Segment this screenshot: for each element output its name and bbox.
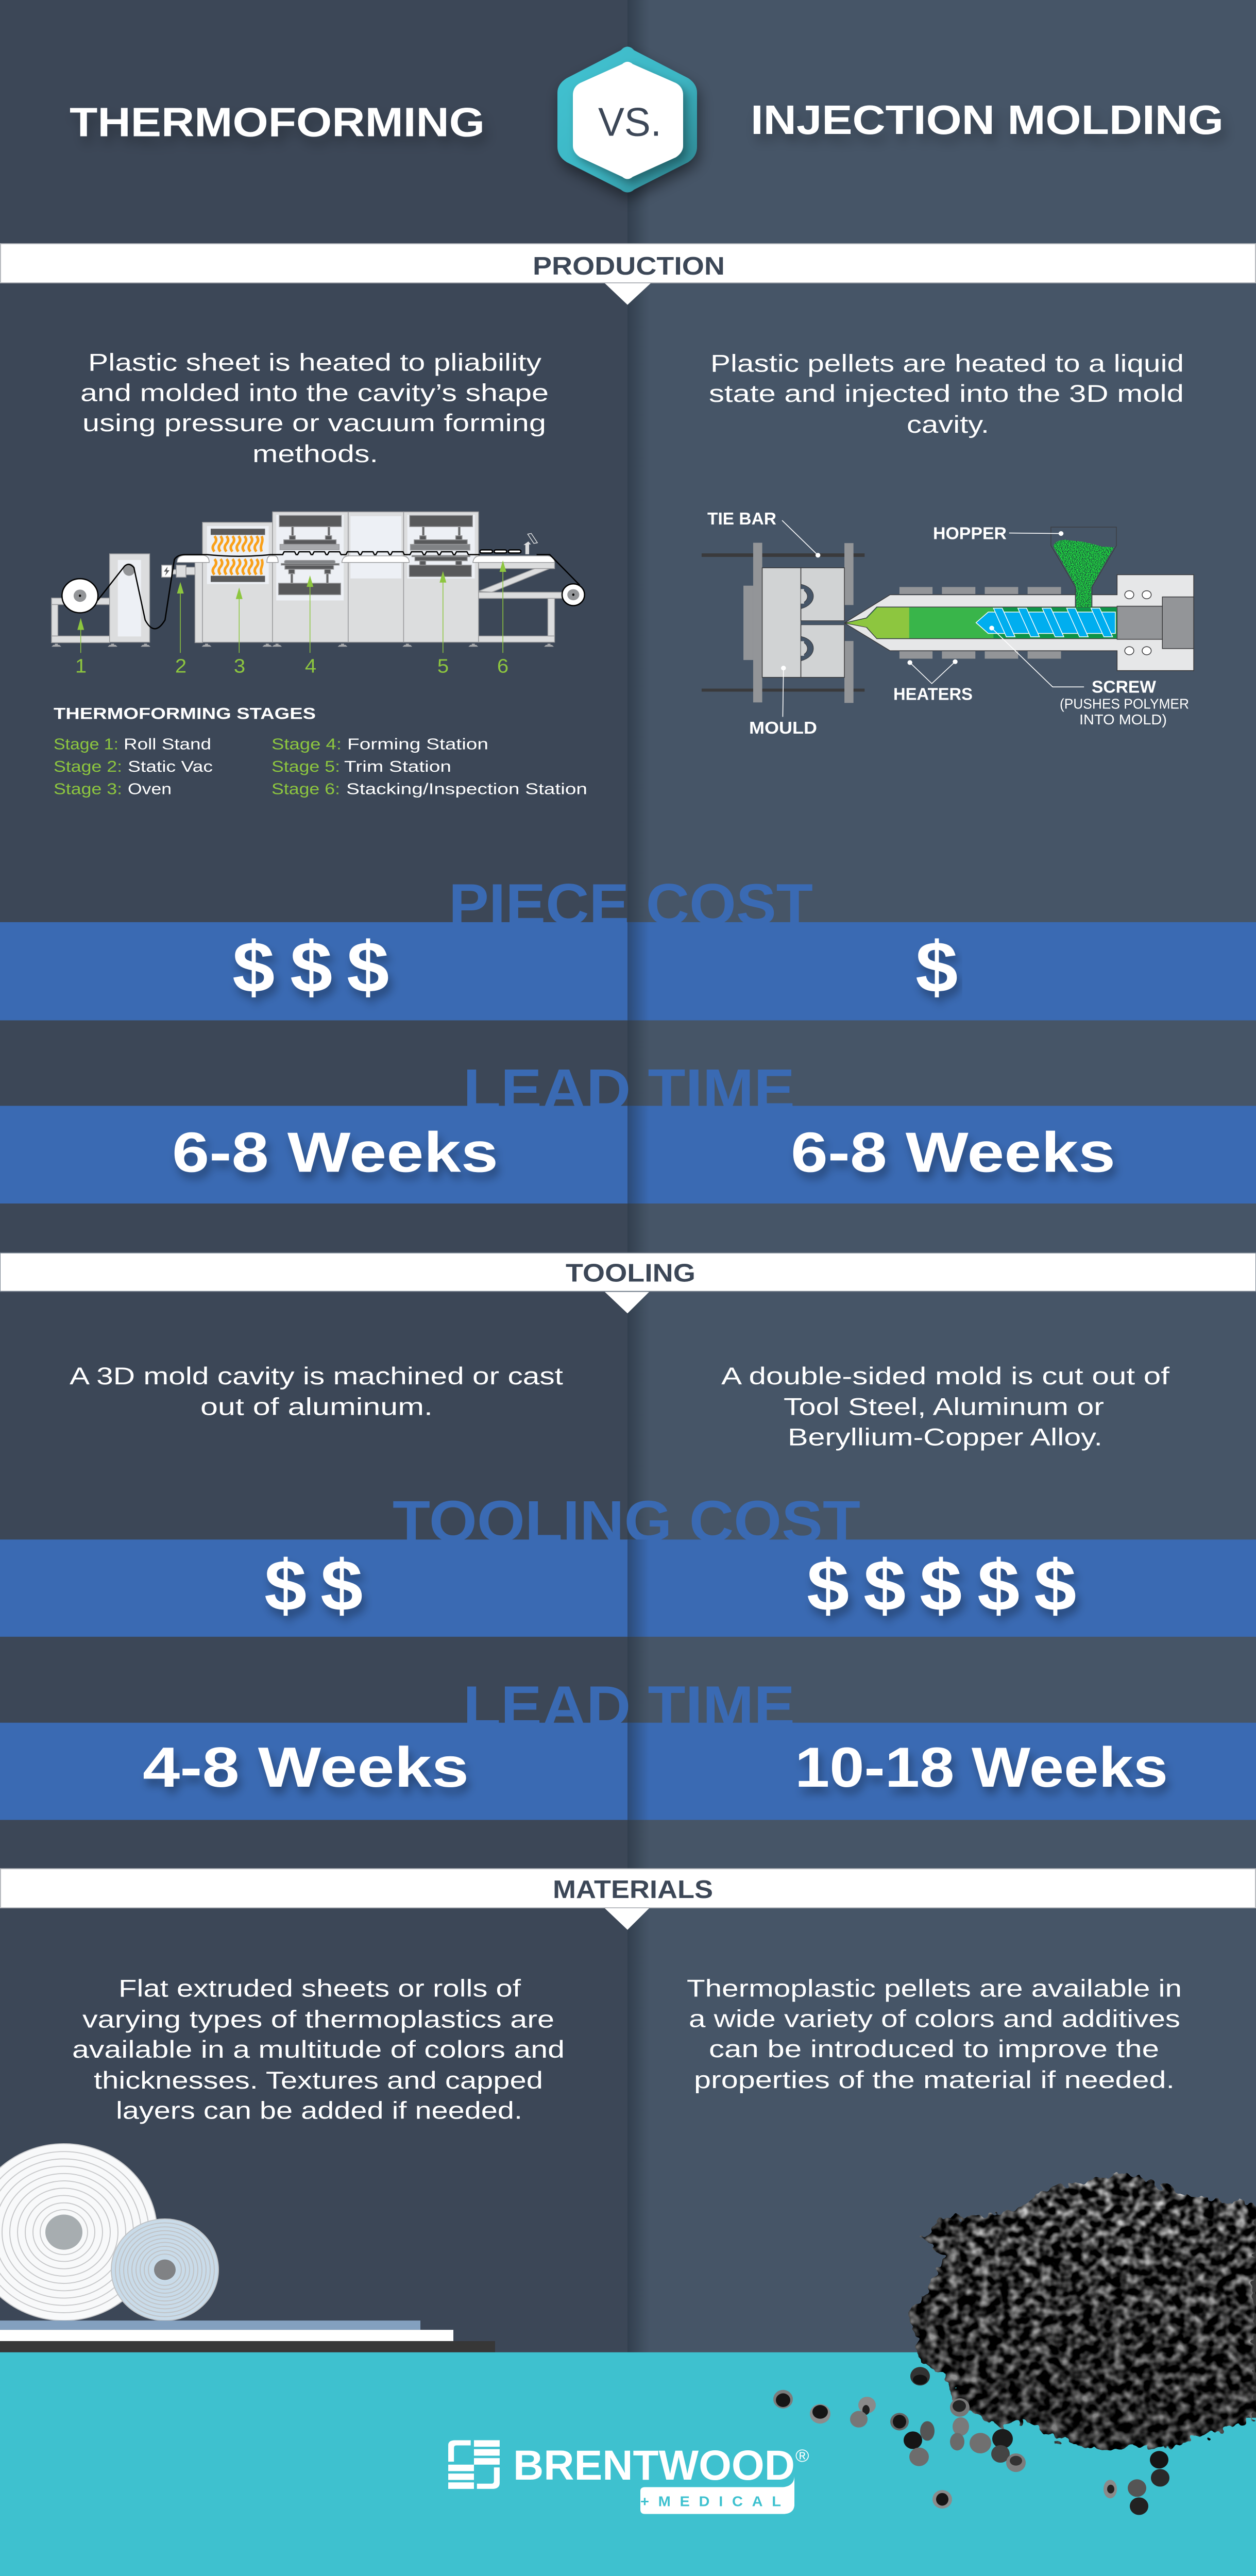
header (70, 47, 1224, 193)
logo: Brentwood Medical: BRENTWOOD (513, 2442, 795, 2489)
platens (743, 543, 854, 703)
diagram labels: SCREW (1092, 677, 1157, 697)
title: injection molding: INJECTION MOLDING (751, 97, 1224, 143)
text: injection molding production description: state and injected into the 3D mold (709, 380, 1184, 408)
melt chamber (844, 607, 1117, 639)
sheet path (97, 552, 580, 629)
scattered pellets (773, 2367, 1169, 2515)
legend: thermoforming stages: Static Vac (128, 758, 213, 775)
section banner: materials: MATERIALS (553, 1875, 713, 1904)
panel: production lead time: 6-8 Weeks (791, 1121, 1115, 1184)
text: thermoforming production description (80, 349, 549, 468)
legend: thermoforming stages: Stage 1: (54, 735, 118, 753)
stage numbers: 4 (305, 655, 316, 677)
section banner: production (1, 244, 1255, 305)
logo: Brentwood Medical: ® (795, 2446, 809, 2466)
text: injection molding tooling description: Tool Steel, Aluminum or (784, 1394, 1104, 1420)
green stage arrows (77, 561, 506, 653)
panel: tooling lead time: 4-8 Weeks (143, 1736, 469, 1799)
icon: small blue roll (111, 2219, 218, 2320)
stacked parts (480, 550, 521, 553)
legend: thermoforming stages: Trim Station (344, 758, 451, 775)
text: thermoforming materials description: layers can be added if needed. (116, 2097, 522, 2124)
illustration: plastic rolls and sheets (0, 2144, 495, 2352)
diagram labels: TIE BAR (707, 510, 776, 529)
icon: logo mark (448, 2440, 500, 2489)
mould (762, 568, 844, 677)
diagram labels: HOPPER (933, 524, 1007, 543)
rolls (62, 579, 98, 613)
text: thermoforming materials description: varying types of thermoplastics are (82, 2006, 554, 2033)
text: thermoforming tooling description (70, 1363, 564, 1420)
diagram: injection molding machine (702, 510, 1194, 738)
medical tab (640, 2477, 794, 2514)
stage numbers: 5 (437, 655, 449, 677)
rear housing (1117, 597, 1194, 649)
conveyor rests (177, 555, 554, 563)
exit table (479, 563, 563, 642)
text: injection molding materials description (687, 1975, 1182, 2094)
diagram labels (707, 510, 1189, 738)
text: thermoforming materials description: available in a multitude of colors and (72, 2036, 565, 2063)
text: thermoforming materials description: Flat extruded sheets or rolls of (118, 1975, 521, 2002)
section banner: tooling: TOOLING (566, 1259, 695, 1287)
legend: thermoforming stages: Forming Station (347, 735, 488, 753)
trim station press (409, 515, 472, 577)
text: injection molding tooling description: Beryllium-Copper Alloy. (788, 1423, 1102, 1451)
legend: thermoforming stages: Stacking/Inspection Station (346, 780, 587, 798)
stage numbers: 1 (75, 655, 87, 677)
diagram labels: MOULD (749, 719, 817, 738)
diagram labels: (PUSHES POLYMER (1060, 696, 1189, 711)
stage numbers: 3 (234, 655, 245, 677)
panel: piece cost: PIECE COST (449, 872, 813, 937)
legend: thermoforming stages: Oven (128, 780, 172, 798)
vs hexagon badge (557, 47, 697, 193)
section banner: tooling (0, 1253, 1256, 1313)
text: injection molding tooling description: A double-sided mold is cut out of (721, 1363, 1170, 1389)
panel: production lead time: LEAD TIME (463, 1057, 795, 1122)
text: thermoforming tooling description: out of aluminum. (200, 1394, 433, 1420)
diagram labels: INTO MOLD) (1079, 711, 1167, 727)
section banner: materials (1, 1869, 1255, 1930)
barrel (844, 575, 1194, 671)
legend: thermoforming stages: Stage 5: (271, 758, 340, 775)
panel: tooling lead time: 10-18 Weeks (795, 1736, 1168, 1799)
panel: production lead time (0, 1057, 1256, 1204)
screw (976, 608, 1115, 637)
text: thermoforming tooling description: A 3D mold cavity is machined or cast (70, 1363, 564, 1389)
section banner: production: PRODUCTION (533, 251, 725, 280)
panel: tooling cost (0, 1489, 1256, 1637)
tie bars (702, 553, 864, 691)
diagram: thermoforming machine (52, 512, 585, 677)
text: thermoforming materials description (72, 1975, 565, 2124)
text: thermoforming production description: methods. (252, 440, 378, 468)
title: thermoforming: THERMOFORMING (70, 99, 485, 145)
text: injection molding materials description: properties of the material if needed. (694, 2066, 1175, 2094)
text: thermoforming production description: using pressure or vacuum forming (82, 410, 546, 437)
footer band (0, 2352, 1256, 2576)
panel: tooling lead time: LEAD TIME (463, 1674, 795, 1739)
legend: thermoforming stages: Stage 4: (271, 735, 342, 753)
forming station press (279, 515, 342, 595)
text: thermoforming production description: and molded into the cavity’s shape (80, 380, 549, 406)
panel: production lead time: 6-8 Weeks (172, 1121, 498, 1184)
text: injection molding production description (709, 350, 1184, 438)
logo: Brentwood Medical: +MEDICAL (640, 2493, 781, 2509)
panel: tooling cost: TOOLING COST (393, 1489, 860, 1554)
legend: thermoforming stages: Stage 3: (54, 780, 122, 798)
diagram labels: HEATERS (893, 685, 973, 704)
legend: thermoforming stages: Stage 6: (271, 780, 340, 798)
panel: tooling cost: $$$$$ (807, 1545, 1076, 1626)
illustration: pile of plastic pellets (773, 2173, 1256, 2515)
roll stand (52, 554, 149, 642)
text: thermoforming materials description: thicknesses. Textures and capped (94, 2067, 543, 2094)
machine cabinets (195, 512, 479, 642)
text: injection molding production description: Plastic pellets are heated to a liquid (710, 350, 1184, 377)
icon: flat sheets (0, 2320, 495, 2352)
vs hexagon badge: VS. (598, 100, 661, 144)
legend: thermoforming stages (54, 704, 587, 798)
text: thermoforming production description: Plastic sheet is heated to pliability (88, 349, 542, 376)
hopper (1051, 527, 1116, 607)
legend: thermoforming stages: Roll Stand (124, 735, 211, 753)
oven heaters (211, 529, 265, 582)
panel: piece cost: $ (915, 926, 958, 1008)
text: injection molding materials description: can be introduced to improve the (709, 2036, 1159, 2063)
text: injection molding materials description: a wide variety of colors and additives (689, 2006, 1180, 2032)
panel: piece cost (0, 872, 1256, 1020)
legend: thermoforming stages: THERMOFORMING STAGES (54, 704, 316, 722)
logo: Brentwood Medical (448, 2440, 809, 2514)
icon: large white roll (0, 2144, 157, 2320)
heaters (899, 587, 1061, 658)
feet (52, 643, 554, 647)
panel: piece cost: $$$ (232, 926, 389, 1008)
panel: tooling cost: $$ (264, 1545, 363, 1626)
static vac (162, 565, 202, 577)
stage numbers: 2 (175, 655, 186, 677)
panel: tooling lead time (0, 1674, 1256, 1820)
text: injection molding materials description: Thermoplastic pellets are available in (687, 1975, 1182, 2002)
text: injection molding production description: cavity. (907, 411, 989, 438)
legend: thermoforming stages: Stage 2: (54, 758, 122, 775)
stage numbers (75, 655, 508, 677)
text: injection molding tooling description (721, 1363, 1170, 1451)
leader lines (782, 520, 1084, 717)
stage numbers: 6 (497, 655, 508, 677)
